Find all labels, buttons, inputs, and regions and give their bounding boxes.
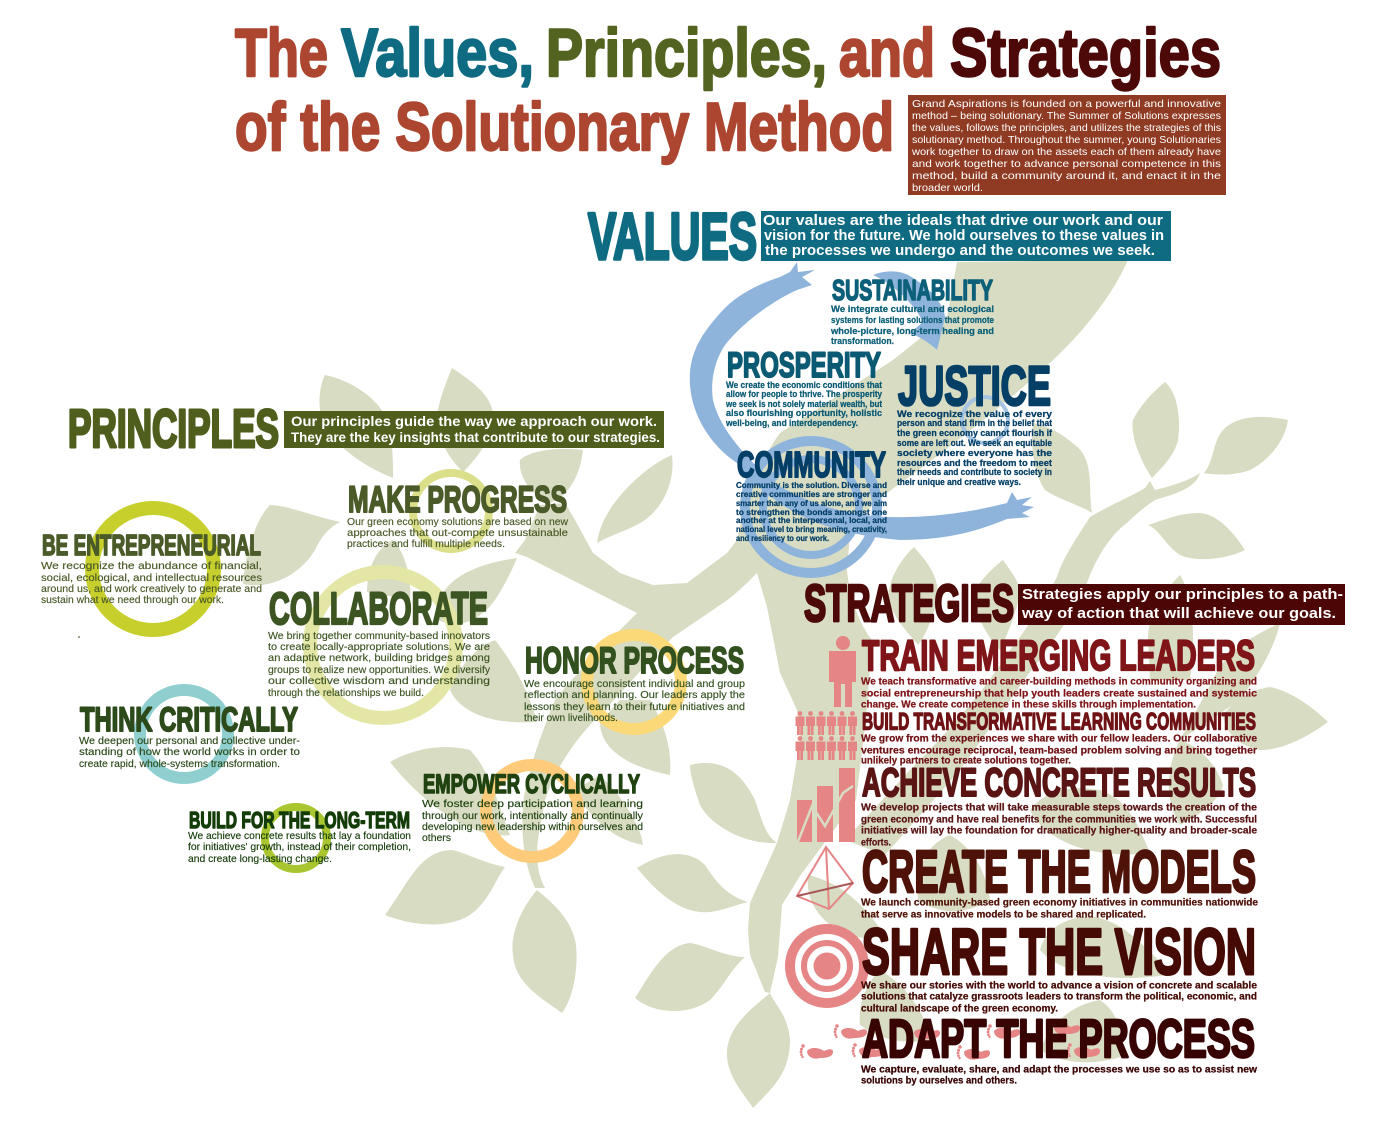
strategy: share the vision: We share our stories with the world to advance a vision of concrete and scalable [861,980,1257,992]
principle: collaborate: to create locally-appropriate solutions. We are [268,642,490,653]
values heading: VALUES [588,199,757,273]
value: community: smarter than any of us alone, and we aim [736,499,887,508]
intro text box: method – being solutionary. The Summer of Solutions expresses [912,110,1221,122]
strategy: create the models: that serve as innovative models to be shared and replicated. [861,910,1146,920]
principle: be entrepreneurial: BE ENTREPRENEURIAL [42,530,261,562]
value: justice: some are left out. We seek an equitable [897,438,1052,448]
icon: target [790,929,864,1003]
strategies description box [1018,584,1345,625]
principle: be entrepreneurial: social, ecological, and intellectual resources [41,573,262,584]
panel: principles [41,399,745,865]
intro text box: work together to draw on the assets each of them already have [911,146,1221,158]
value: prosperity: PROSPERITY [727,346,881,385]
principle: build for the long-term: We achieve concrete results that lay a foundation [188,831,411,842]
intro text box: Grand Aspirations is founded on a powerful and innovative [912,98,1221,110]
strategies description box: way of action that will achieve our goals. [1021,605,1336,622]
principle: honor process: reflection and planning. Our leaders apply the [524,690,745,701]
icon: pyramid [797,847,853,909]
value: community: national level to bring meaning, creativity, [736,525,887,534]
value: prosperity: we seek is not solely material wealth, but [725,399,882,409]
icon: person [829,636,856,707]
title: Strategies [950,15,1221,91]
value: prosperity: We create the economic conditions that [726,380,882,390]
values description box: Our values are the ideals that drive our work and our [763,212,1163,229]
value: prosperity: well-being, and interdependency. [725,418,858,428]
principle: collaborate: We bring together community-based innovators [268,631,490,642]
intro text box: the values, follows the principles, and utilizes the strategies of this [912,122,1221,134]
value: justice: We recognize the value of every [897,409,1052,419]
principle: empower cyclically: developing new leadership within ourselves and [422,822,643,833]
strategy: share the vision: solutions that catalyze grassroots leaders to transform the political, economic, and [861,992,1257,1002]
strategy: achieve concrete results [861,761,1257,848]
value: community: to strengthen the bonds amongst one [736,508,887,517]
values description box [761,211,1171,261]
value: prosperity [725,346,882,428]
principle: honor process: HONOR PROCESS [525,640,744,681]
principle: think critically: standing of how the world works in order to [79,747,300,758]
principle: build for the long-term: and create long-lasting change. [188,854,332,865]
value: sustainability: We integrate cultural and ecological [831,304,994,315]
intro text box [908,95,1226,195]
value: justice: resources and the freedom to meet [897,458,1052,468]
title: Values, [341,15,534,91]
principle: think critically [79,701,300,770]
value: sustainability: transformation. [831,336,894,347]
values description box: vision for the future. We hold ourselves to these values in [764,227,1164,244]
principle: make progress: practices and fulfill multiple needs. [347,539,505,550]
strategy: create the models [861,839,1258,920]
principle: collaborate: COLLABORATE [269,583,488,634]
strategy: build transformative learning communities: We grow from the experiences we share with our fellow leaders. Our collaborative [861,734,1257,744]
principle: make progress [347,479,568,550]
principle: build for the long-term: BUILD FOR THE LONG-TERM [189,807,410,833]
panel: values [588,199,1171,543]
value: justice: their needs and contribute to society in [897,467,1052,477]
principle: empower cyclically: We foster deep participation and learning [422,799,643,810]
intro text box: solutionary method. Throughout the summer, young Solutionaries [912,134,1221,146]
icon: group of people [796,711,857,760]
value: justice: the green economy cannot flourish if [897,428,1053,438]
value: community: creative communities are stronger and [736,490,887,499]
principle: empower cyclically: others [422,833,451,844]
strategy: build transformative learning communities: ventures encourage reciprocal, team-based problem solving and bring together [861,746,1257,756]
strategy: achieve concrete results: initiatives will lay the foundation for dramatically higher-quality and broader-scale [861,826,1257,836]
value: sustainability: whole-picture, long-term healing and [830,326,994,337]
principle: empower cyclically: through our work, intentionally and continually [422,811,644,822]
value: community: and resiliency to our work. [736,534,829,543]
value: justice: their unique and creative ways. [897,477,1021,487]
intro text box: and work together to advance personal competence in this [912,158,1221,170]
blue circular arrows behind values [690,262,1034,573]
principles description box: Our principles guide the way we approach our work. [291,413,657,429]
principle: be entrepreneurial: We recognize the abundance of financial, [41,561,262,572]
principle: make progress: approaches that out-compete unsustainable [347,528,568,539]
principle: be entrepreneurial: sustain what we need through our work. [41,595,224,606]
strategy: share the vision [861,915,1257,1014]
value: sustainability: systems for lasting solutions that promote [831,315,994,326]
principle: collaborate: groups to realize new opportunities. We diversify [268,665,491,676]
value: prosperity: allow for people to thrive. The prosperity [726,389,882,399]
stray dot [78,636,80,638]
strategies heading: STRATEGIES [804,575,1014,633]
principle: honor process: their own livelihoods. [524,713,618,724]
principles heading: PRINCIPLES [68,399,279,459]
strategy: build transformative learning communities: unlikely partners to create solutions together. [861,756,1071,766]
principles description box: They are the key insights that contribute to our strategies. [291,429,660,445]
value: justice: person and stand firm in the belief that [897,418,1052,428]
title: Principles, [546,15,827,91]
values description box: the processes we undergo and the outcomes we seek. [765,242,1155,259]
principle: collaborate: an adaptive network, building bridges among [268,653,490,664]
value: sustainability: SUSTAINABILITY [832,275,993,307]
value: prosperity: also flourishing opportunity, holistic [726,408,882,418]
value: community: Community is the solution. Diverse and [736,481,887,490]
value: justice: JUSTICE [898,354,1051,417]
principle: make progress: MAKE PROGRESS [348,479,567,520]
value: justice [897,354,1053,487]
panel: strategies [790,575,1345,1086]
title: and [839,15,935,91]
title: The [235,15,328,91]
strategy: achieve concrete results: efforts. [861,838,891,848]
value: community [736,444,887,543]
strategy: adapt the process [861,1009,1258,1086]
strategy: adapt the process: We capture, evaluate, share, and adapt the processes we use so as to assist new [861,1064,1258,1076]
principle: empower cyclically [422,769,644,844]
principle: be entrepreneurial: around us, and work creatively to generate and [41,584,262,595]
strategy: train emerging leaders: change. We create competence in these skills through implementation. [861,700,1196,710]
strategy: create the models: We launch community-based green economy initiatives in communities nationwide [861,898,1258,908]
strategy: achieve concrete results: We develop projects that will take measurable steps towards the creation of the [861,802,1257,814]
principle: think critically: create rapid, whole-systems transformation. [79,759,280,770]
value: community: another at the interpersonal, local, and [736,516,887,525]
value: sustainability [830,275,994,347]
icon: footprints [800,1020,1100,1060]
strategy: achieve concrete results: green economy and have real benefits for the communities we work with. Successful [861,814,1257,826]
strategy: train emerging leaders: We teach transformative and career-building methods in community organizing and [861,676,1257,688]
principle: think critically: THINK CRITICALLY [80,701,298,739]
principle: collaborate: our collective wisdom and understanding [268,676,490,687]
principle: build for the long-term: for initiatives' growth, instead of their completion, [188,842,411,853]
icon: bar chart with rising arrow [797,768,855,844]
value: community: COMMUNITY [737,444,886,485]
principle: honor process [524,640,745,724]
strategy: adapt the process: solutions by ourselves and others. [861,1076,1017,1086]
value: justice: society where everyone has the [897,448,1052,458]
strategy: train emerging leaders: social entrepreneurship that help youth leaders create sustained and systemic [861,688,1257,700]
strategy: build transformative learning communities [861,708,1257,766]
principle: think critically: We deepen our personal and collective under- [79,736,300,747]
principle: build for the long-term [188,807,411,865]
principle: honor process: We encourage consistent individual and group [524,679,745,690]
tree illustration background [243,260,1328,1108]
title: of the Solutionary Method [235,89,894,165]
principle: honor process: lessons they learn to their future initiatives and [524,702,745,713]
principle: be entrepreneurial [41,530,262,638]
principle: collaborate: through the relationships we build. [268,688,424,699]
strategy: share the vision: cultural landscape of the green economy. [861,1004,1058,1014]
principle: empower cyclically: EMPOWER CYCLICALLY [423,769,640,799]
intro text box: method, build a community around it, and enact it in the [912,170,1221,182]
strategies description box: Strategies apply our principles to a path- [1022,586,1343,603]
title [235,15,1221,165]
principle: make progress: Our green economy solutions are based on new [347,517,568,528]
intro text box: broader world. [912,182,983,194]
principles description box [284,411,664,448]
principle: collaborate [268,583,491,699]
colored circle rings behind principles [92,473,681,869]
strategy: train emerging leaders [861,632,1257,710]
